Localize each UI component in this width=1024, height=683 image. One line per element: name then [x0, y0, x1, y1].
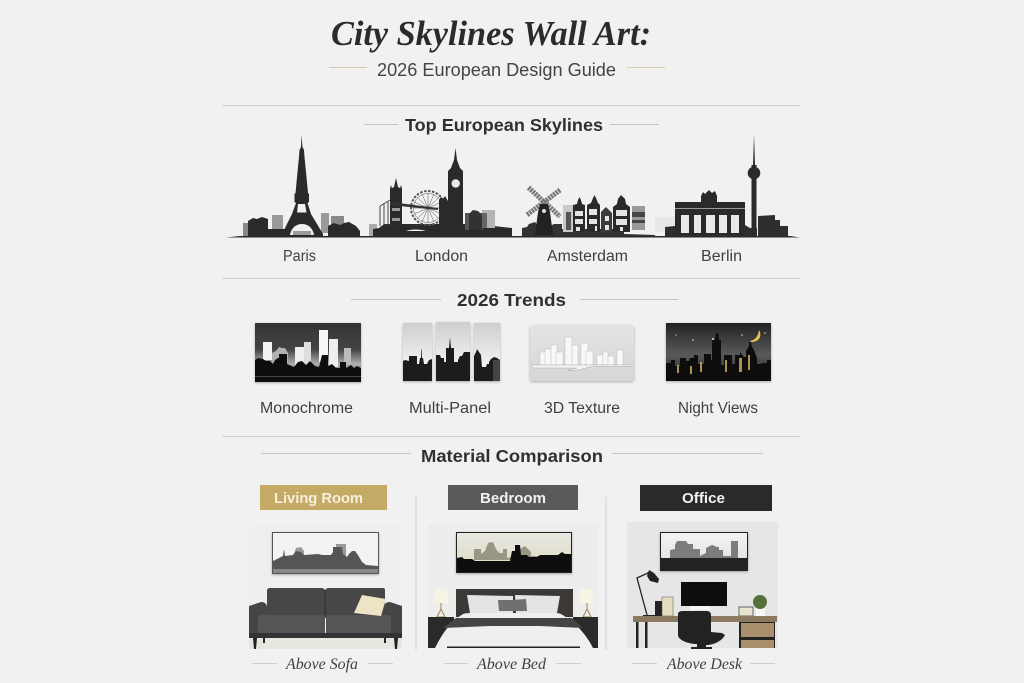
houses [573, 197, 585, 232]
cushion [354, 595, 386, 616]
banner: bedroom [448, 485, 578, 510]
icon: Ferris wheel [411, 191, 445, 225]
illustration: bedroom [428, 524, 598, 649]
Paris skyline [243, 135, 360, 236]
art above sofa [272, 532, 378, 574]
icon: Eiffel Tower [281, 135, 323, 236]
panel: office [627, 485, 778, 673]
bed [435, 589, 593, 648]
art: 3D texture [530, 325, 634, 381]
art: multi-panel [403, 322, 500, 381]
heading: material comparison: Material Comparison [421, 446, 603, 466]
office chair [678, 611, 725, 649]
banner: living room: Living Room [274, 491, 363, 507]
art: night views [666, 323, 771, 381]
panel: living room [249, 485, 402, 673]
city labels: London [415, 248, 468, 265]
trend labels: Multi-Panel [409, 400, 491, 417]
banner: office [640, 485, 772, 511]
panel: bedroom [428, 485, 598, 673]
trend labels: Monochrome [260, 400, 353, 417]
banner: living room [260, 485, 387, 510]
ground line [226, 236, 800, 238]
subtitle: 2026 European Design Guide [377, 60, 616, 80]
art above desk [660, 532, 748, 570]
caption: above bed [444, 656, 581, 673]
illustration: sofa room [249, 524, 402, 649]
skyline chart [226, 134, 800, 238]
heading: 2026 trends: 2026 Trends [457, 290, 566, 310]
art: monochrome [255, 323, 361, 382]
banner: bedroom: Bedroom [480, 491, 546, 507]
books [655, 601, 663, 617]
icon: TV tower [752, 134, 756, 234]
icon: Brandenburg Gate [675, 190, 745, 235]
caption: above desk: Above Desk [666, 656, 743, 673]
city labels: Berlin [701, 248, 742, 265]
nightstands [428, 617, 454, 648]
city labels [283, 248, 742, 265]
section: top European skylines [226, 115, 800, 265]
London skyline [369, 148, 512, 236]
illustration: office [627, 522, 778, 649]
Amsterdam skyline [522, 188, 655, 236]
caption: above bed: Above Bed [476, 656, 546, 673]
city labels: Amsterdam [547, 248, 628, 265]
banner: office: Office [682, 491, 725, 507]
plant [739, 595, 767, 617]
heading: top European skylines: Top European Skylines [405, 115, 603, 135]
desk lamp [637, 570, 659, 617]
icon: Tower Bridge [390, 178, 402, 227]
caption: above sofa: Above Sofa [285, 656, 358, 673]
icon: Big Ben [448, 148, 463, 231]
title: City Skylines Wall Art: [331, 14, 651, 53]
lamps [433, 589, 594, 617]
trend labels [260, 400, 758, 417]
city labels: Paris [283, 248, 316, 265]
monitor [681, 582, 727, 610]
section: 2026 trends [255, 290, 771, 417]
icon: windmill [527, 188, 560, 216]
trend labels: Night Views [678, 400, 758, 417]
section: material comparison [249, 446, 778, 673]
sofa [249, 588, 402, 649]
trend labels: 3D Texture [544, 400, 620, 417]
Berlin skyline [655, 134, 788, 236]
art above bed [456, 532, 572, 572]
desk [633, 616, 777, 648]
